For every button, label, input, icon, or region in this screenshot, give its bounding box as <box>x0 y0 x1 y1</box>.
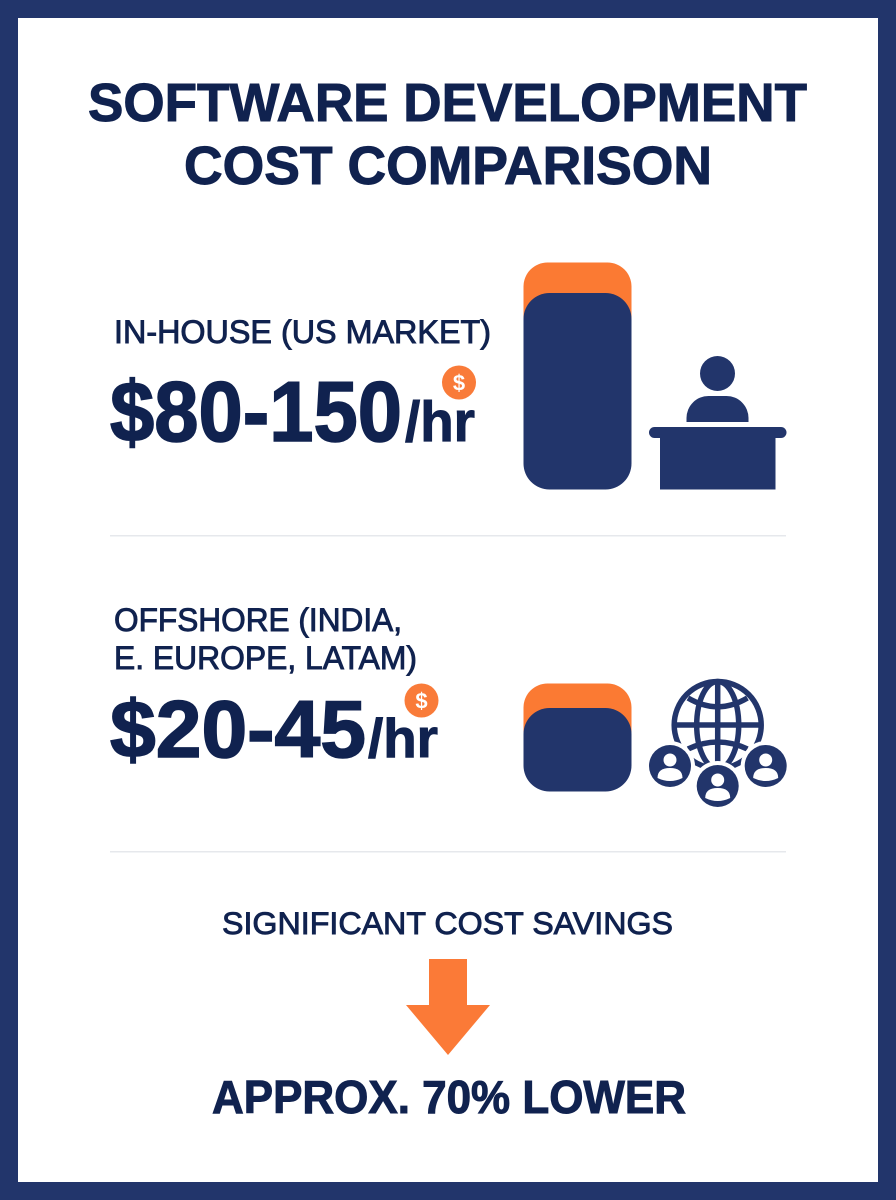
savings figure: APPROX. 70% LOWER <box>212 1071 686 1123</box>
divider <box>110 851 786 852</box>
offshore label <box>114 602 417 676</box>
in-house price: /hr <box>405 390 475 454</box>
globe <box>674 681 761 768</box>
in-house label: IN-HOUSE (US MARKET) <box>114 314 491 350</box>
title: SOFTWARE DEVELOPMENT <box>88 74 807 133</box>
in-house price: $80-150 <box>110 365 402 460</box>
offshore price: $20-45 <box>110 685 366 775</box>
offshore label: OFFSHORE (INDIA, <box>114 602 402 638</box>
person center <box>693 761 743 811</box>
person right <box>741 741 791 791</box>
panel: offshore cost <box>110 602 791 811</box>
offshore cost bar <box>524 684 632 792</box>
icon: dollar badge: $ <box>453 370 465 396</box>
arrow: down <box>406 959 490 1055</box>
in-house cost bar <box>524 262 632 490</box>
icon: dollar badge <box>404 684 438 718</box>
icon: globe with people <box>645 681 791 811</box>
icon: dollar badge: $ <box>415 688 428 714</box>
offshore price: /hr <box>368 707 438 769</box>
icon: person at desk <box>649 356 786 490</box>
title: COST COMPARISON <box>184 137 712 196</box>
divider <box>110 535 786 536</box>
offshore label: E. EUROPE, LATAM) <box>114 640 417 676</box>
title <box>88 74 807 196</box>
savings heading: SIGNIFICANT COST SAVINGS <box>222 905 673 941</box>
panel: in-house cost <box>110 262 786 490</box>
person left <box>645 741 695 791</box>
icon: dollar badge <box>442 366 476 400</box>
